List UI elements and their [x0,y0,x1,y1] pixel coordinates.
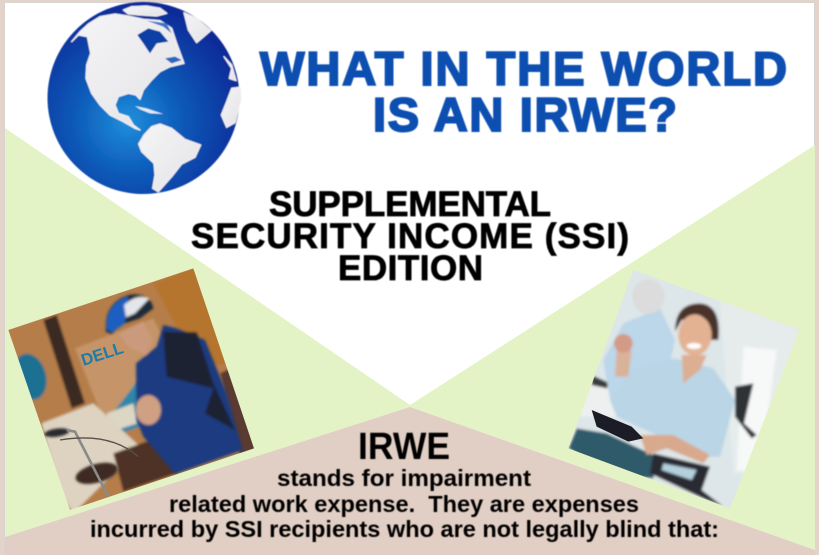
subtitle [191,185,629,288]
bicycle seat [74,460,119,486]
title [260,42,787,141]
woman's arm raised [615,350,632,377]
woman's neck [682,355,707,383]
DELL box logo: DELL [79,338,126,370]
icon: Europe fragment [224,57,236,81]
definition line 1: stands for impairment [277,465,531,491]
icon: Caribbean islands [135,106,163,114]
woman's hair [675,303,719,340]
subtitle line 1: SUPPLEMENTAL [269,185,551,224]
bicycle frame [60,430,138,497]
definition line 2: related work expense. They are expenses [169,491,639,517]
icon: Greenland [184,13,211,43]
man's face [118,322,153,355]
man's hands [136,395,161,425]
icon: Labrador channel [165,57,182,63]
title line 2: IS AN IRWE? [373,88,677,141]
text block: IRWE definition [90,426,719,542]
subtitle line 3: EDITION [338,249,483,288]
heading: IRWE: IRWE [358,426,450,468]
photo: man in bicycle helmet among boxes [8,268,254,510]
icon: Hudson Bay [137,28,168,53]
title line 1: WHAT IN THE WORLD [260,42,787,95]
photo: smiling woman in wheelchair with clipboard [568,270,800,508]
woman's forearm [640,435,710,463]
panel: right green triangle [410,145,815,550]
icon: South America [139,124,201,192]
panel: bottom definition triangle [5,407,815,555]
panel: left green triangle [5,128,410,537]
icon: globe [48,2,241,194]
woman's face [678,314,712,356]
clipboard [592,410,643,442]
background person [603,308,675,400]
helmet [106,294,153,334]
man's jacket [136,325,243,474]
subtitle line 2: SECURITY INCOME (SSI) [191,217,629,256]
icon: Africa [221,87,241,127]
definition line 3: incurred by SSI recipients who are not legally blind that: [90,516,719,542]
wheelchair handle [735,383,757,438]
woman's shirt [610,358,735,457]
jeans [568,428,657,478]
desk at left [580,384,616,416]
wheelchair frame [650,453,723,507]
icon: Arctic islands [123,6,167,16]
icon: North America [72,14,184,130]
